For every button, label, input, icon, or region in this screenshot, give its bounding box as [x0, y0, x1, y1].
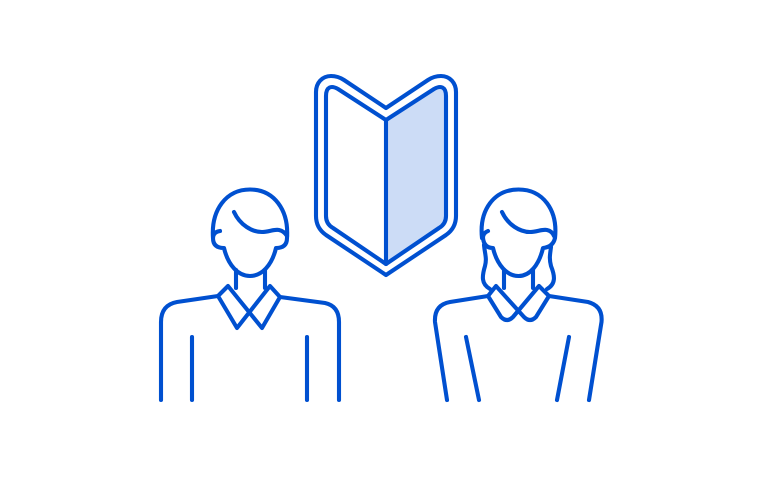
woman neck: [504, 270, 533, 288]
woman side hair: [483, 245, 554, 289]
man head and hair: [213, 190, 287, 276]
icon: beginner shield: [316, 76, 456, 275]
woman fringe: [502, 212, 554, 236]
shield centre fold: [384, 120, 388, 264]
man collar: [218, 286, 280, 328]
man shoulders and sides: [161, 296, 339, 400]
woman arms: [466, 337, 569, 400]
shield outer outline: [316, 76, 456, 275]
icon: man: [161, 190, 339, 400]
man arms: [192, 337, 307, 400]
man neck: [236, 270, 265, 288]
shield inner outline: [326, 87, 446, 264]
woman collar: [488, 286, 549, 320]
shield shaded right half: [386, 87, 446, 264]
man fringe: [234, 212, 287, 236]
woman head and hair: [482, 190, 555, 276]
woman shoulders and sides: [435, 296, 602, 400]
icon: woman: [435, 190, 602, 400]
